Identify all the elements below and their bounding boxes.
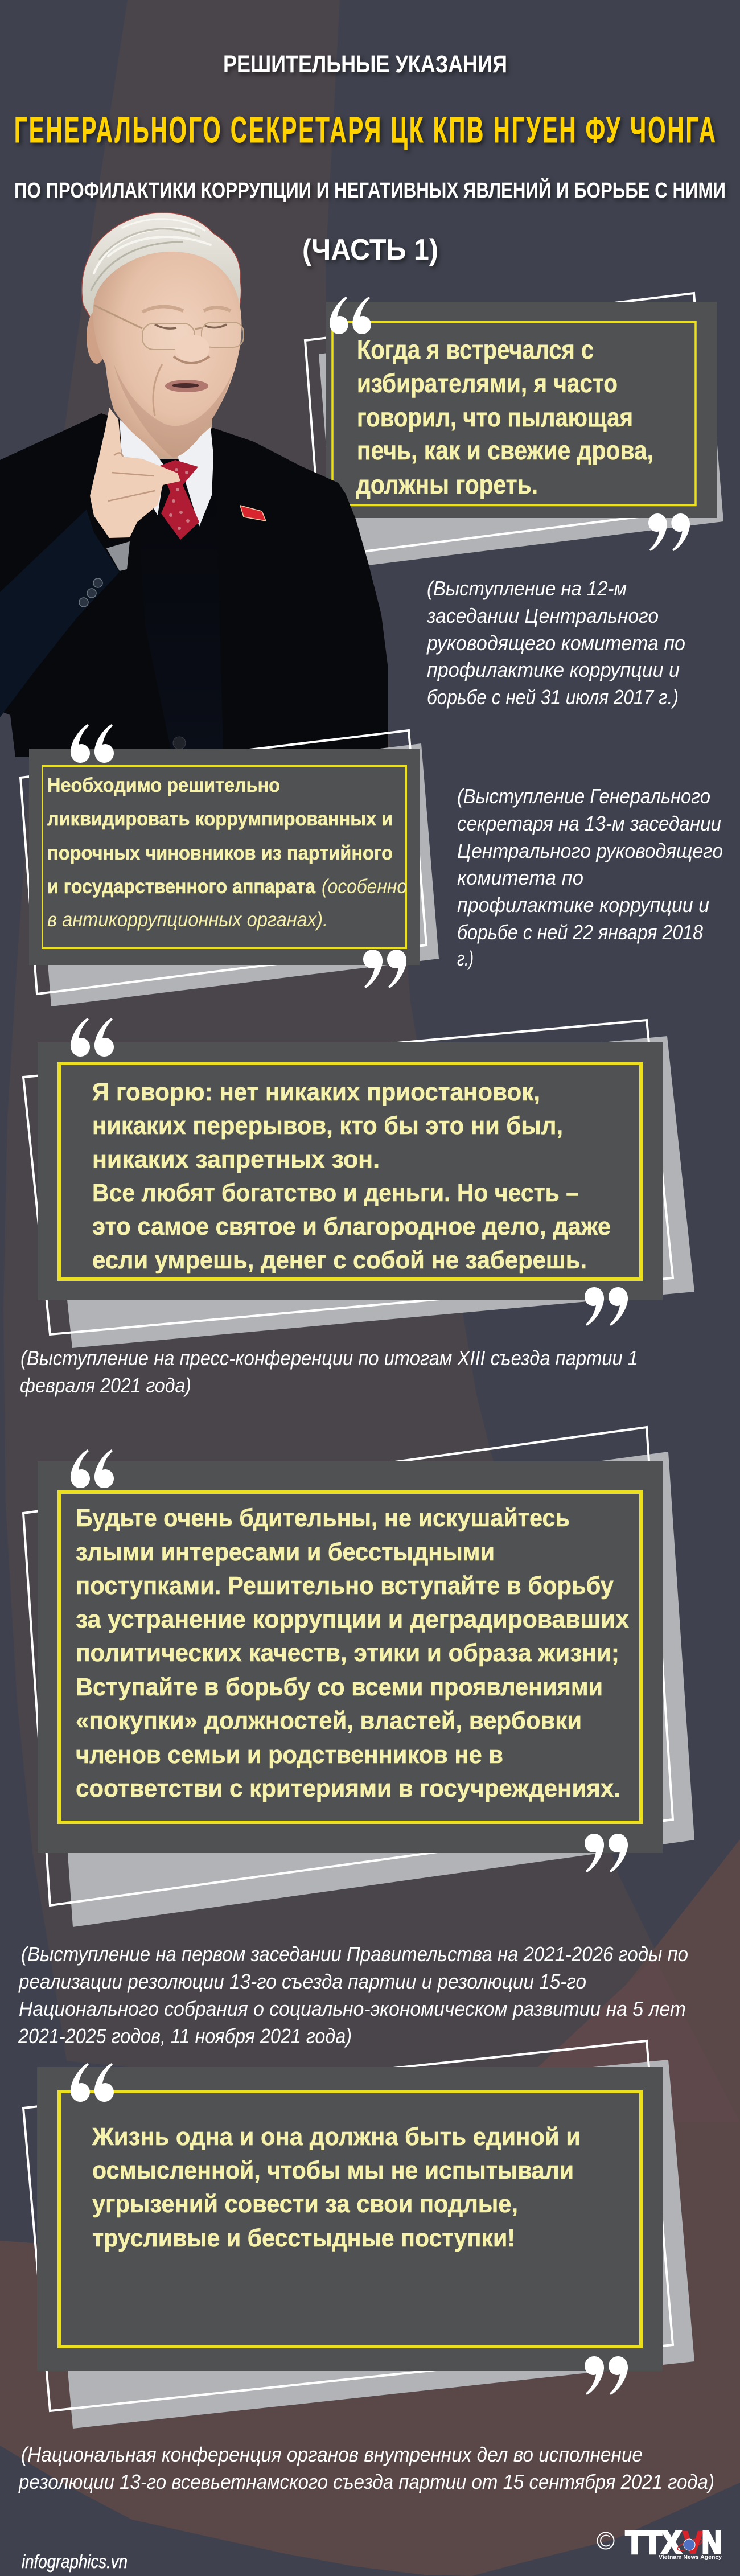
icon: closing quote <box>363 950 406 988</box>
quote text 4: Будьте очень бдительны, не искушайтесь <box>76 1504 570 1532</box>
heading: first line: РЕШИТЕЛЬНЫЕ УКАЗАНИЯ <box>223 51 507 78</box>
icon: opening quote <box>71 724 114 763</box>
citation 5 <box>18 2443 714 2493</box>
quote text 2 <box>47 774 407 931</box>
panel: quote 1 <box>305 293 723 569</box>
quote text 4: политических качеств, этики и образа жизни; <box>76 1639 619 1667</box>
face folds <box>153 364 162 416</box>
shirt collar <box>120 420 213 527</box>
citation 2: комитета по <box>457 866 583 889</box>
citation 3: (Выступление на пресс-конференции по итогам XIII съезда партии 1 <box>20 1346 638 1370</box>
quote text 2: ликвидировать коррумпированных и <box>47 808 393 830</box>
sleeve <box>0 510 120 717</box>
quote text 1: должны гореть. <box>356 470 538 499</box>
jaw shadow <box>114 364 232 458</box>
vest button <box>173 737 186 749</box>
citation 1 <box>426 577 685 709</box>
citation 3: февраля 2021 года) <box>20 1374 191 1397</box>
citation 4: (Выступление на первом заседании Правительства на 2021-2026 годы по <box>21 1942 688 1966</box>
neck <box>128 393 213 459</box>
lapel pin <box>240 506 266 521</box>
logo: TTXVN: N <box>702 2524 722 2560</box>
citation 2: секретаря на 13-м заседании <box>457 812 721 835</box>
quote text 3: никаких перерывов, кто бы это ни был, <box>92 1112 563 1140</box>
panel: quote 3 <box>23 1018 694 1348</box>
face <box>93 252 241 458</box>
quote text 2: (особенно <box>322 876 407 898</box>
ear <box>87 310 107 364</box>
quote text 1: избирателями, я часто <box>357 368 618 398</box>
quote text 5: трусливые и бесстыдные поступки! <box>92 2224 515 2252</box>
quote text 2: порочных чиновников из партийного <box>47 842 393 864</box>
citation 1: (Выступление на 12-м <box>427 577 627 600</box>
citation 2: профилактике коррупции и <box>457 893 709 917</box>
citation 1: заседании Центрального <box>426 604 659 627</box>
sleeve buttons <box>79 578 102 607</box>
citation 2: Центрального руководящего <box>457 839 723 862</box>
quote text 5 <box>92 2123 581 2252</box>
logo: TTXVN: V <box>683 2524 703 2560</box>
brows <box>142 306 231 312</box>
icon: opening quote <box>71 1449 114 1488</box>
icon: opening quote <box>71 2063 114 2102</box>
jacket <box>0 413 388 757</box>
quote text 4: соответстви с критериями в госучреждениях. <box>76 1774 620 1802</box>
quote text 4: членов семьи и родственников не в <box>76 1741 503 1769</box>
logo: TTXVN <box>626 2524 722 2561</box>
icon: opening quote <box>330 297 371 334</box>
quote text 4: злыми интересами и бесстыдными <box>76 1538 495 1566</box>
quote text 5: угрызений совести за свои подлые, <box>92 2190 518 2218</box>
hand <box>90 408 180 538</box>
quote text 1: печь, как и свежие дрова, <box>357 436 653 465</box>
quote text 1: говорил, что пылающая <box>357 402 633 432</box>
icon: opening quote <box>71 1018 114 1057</box>
quote text 3: это самое святое и благородное дело, даже <box>92 1213 611 1240</box>
source website: infographics.vn <box>22 2551 128 2572</box>
citation 5: (Национальная конференция органов внутренних дел во исполнение <box>21 2443 643 2466</box>
citation 4 <box>18 1942 688 2048</box>
icon: closing quote <box>585 1287 628 1326</box>
quote text 5: Жизнь одна и она должна быть единой и <box>92 2123 581 2151</box>
quote text 4: за устранение коррупции и деградировавших <box>76 1605 630 1633</box>
citation 2: г.) <box>457 947 474 970</box>
citation 2: борьбе с ней 22 января 2018 <box>457 921 703 944</box>
icon: closing quote <box>648 513 690 551</box>
quote text 3 <box>92 1078 611 1274</box>
quote text 2: Необходимо решительно <box>47 774 280 796</box>
logo: TTXVN: Vietnam News Agency <box>659 2554 722 2561</box>
panel: quote 5 <box>23 2041 694 2429</box>
tie <box>160 460 199 540</box>
glasses <box>142 322 244 350</box>
citation 4: 2021-2025 годов, 11 ноября 2021 года) <box>18 2024 352 2048</box>
hair <box>82 213 241 319</box>
mouth <box>165 380 208 392</box>
citation 4: Национального собрания о социально-экономическом развитии на 5 лет <box>19 1997 686 2020</box>
quote text 3: Я говорю: нет никаких приостановок, <box>92 1078 540 1106</box>
quote text 4: Вступайте в борьбу со всеми проявлениями <box>76 1673 603 1701</box>
person: portrait <box>0 213 388 757</box>
quote text 2: и государственного аппарата <box>47 876 315 898</box>
icon: closing quote <box>585 1834 628 1872</box>
nose <box>175 335 209 362</box>
citation 2: (Выступление Генерального <box>457 784 710 808</box>
quote text 4: поступками. Решительно вступайте в борьбу <box>76 1572 614 1600</box>
quote text 2: в антикоррупционных органах). <box>47 909 328 931</box>
quote text 4 <box>76 1504 630 1802</box>
heading: part number: (ЧАСТЬ 1) <box>302 233 438 266</box>
quote text 5: осмысленной, чтобы мы не испытывали <box>92 2156 574 2184</box>
citation 3 <box>20 1346 638 1397</box>
citation 1: борьбе с ней 31 июля 2017 г.) <box>427 685 679 709</box>
eyes <box>155 324 227 328</box>
quote text 4: «покупки» должностей, властей, вербовки <box>76 1707 582 1735</box>
panel: quote 2 <box>20 724 439 1006</box>
quote text 1 <box>356 335 653 499</box>
quote text 3: никаких запретных зон. <box>92 1145 380 1173</box>
vest <box>139 490 223 749</box>
citation 1: руководящего комитета по <box>426 631 685 655</box>
icon: copyright <box>598 2532 614 2549</box>
panel: quote 4 <box>23 1427 694 1927</box>
quote text 1: Когда я встречался с <box>357 335 594 364</box>
shirt cuff <box>106 541 130 571</box>
quote text 3: Все любят богатство и деньги. Но честь – <box>92 1179 579 1207</box>
quote text 3: если умрешь, денег с собой не заберешь. <box>92 1246 587 1274</box>
hair streaks <box>91 219 211 290</box>
citation 1: профилактике коррупции и <box>427 658 680 681</box>
icon: closing quote <box>585 2356 628 2395</box>
logo: TTXVN: TTX <box>626 2524 681 2560</box>
citation 2 <box>457 784 723 970</box>
citation 4: реализации резолюции 13-го съезда партии и резолюции 15-го <box>18 1970 586 1993</box>
